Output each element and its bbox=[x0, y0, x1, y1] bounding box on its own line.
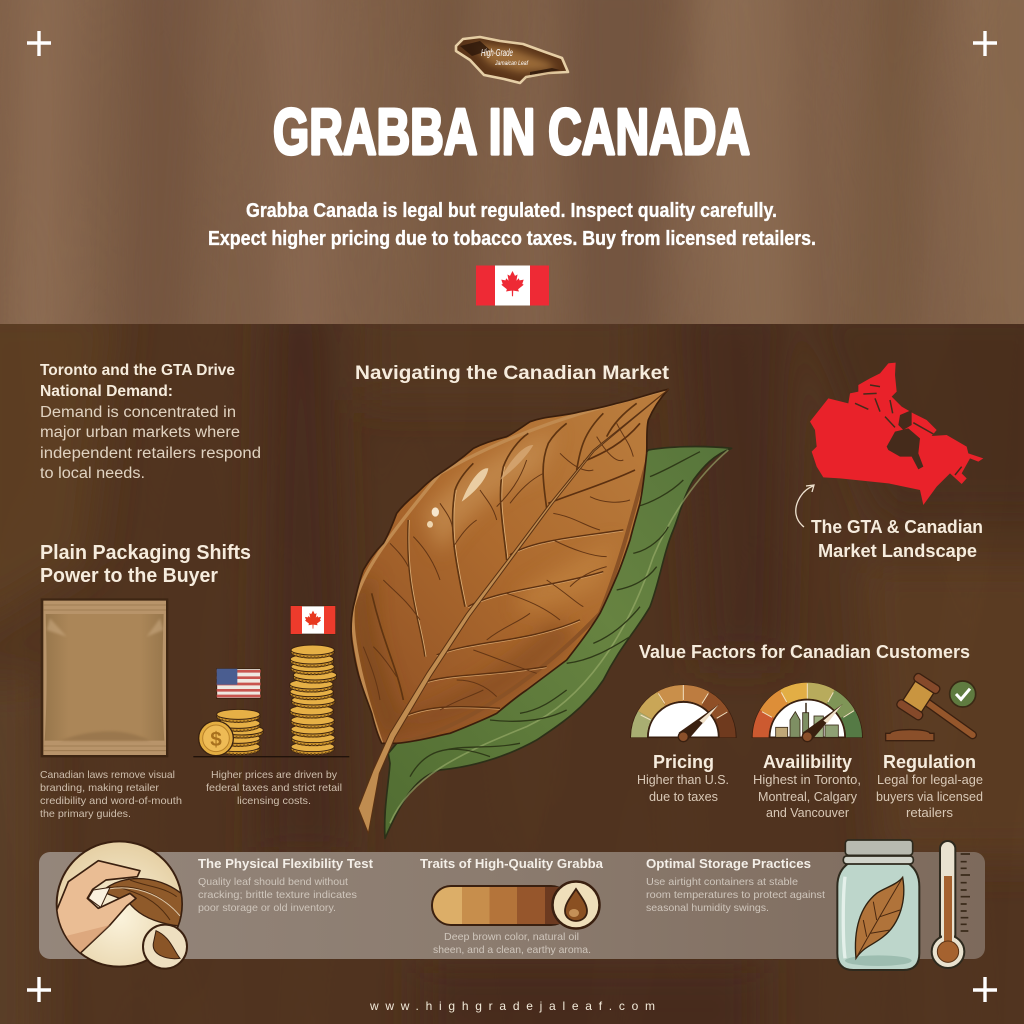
heading: Navigating the Canadian Market: Navigating the Canadian Market bbox=[355, 362, 670, 384]
factor: pricing: due to taxes bbox=[649, 790, 718, 804]
heading: Power to the Buyer bbox=[40, 565, 218, 587]
panel: value factors bbox=[630, 642, 983, 820]
factor: pricing bbox=[637, 752, 729, 804]
text: storage practices: Use airtight containers at stable bbox=[646, 876, 798, 888]
footer: website: www.highgradejaleaf.com bbox=[369, 999, 655, 1013]
factor: pricing: Pricing bbox=[653, 752, 714, 772]
icon: blank pouch bbox=[41, 598, 168, 757]
caption: packaging: branding, making retailer bbox=[40, 782, 160, 794]
caption: prices: licensing costs. bbox=[237, 795, 311, 807]
skyline bbox=[776, 703, 838, 737]
map: Canada bbox=[810, 363, 983, 505]
caption: packaging: the primary guides. bbox=[40, 808, 131, 820]
caption: prices: Higher prices are driven by bbox=[211, 769, 338, 781]
leaf shading bbox=[350, 430, 617, 743]
intro text bbox=[208, 200, 816, 250]
title: GRABBA IN CANADA bbox=[273, 95, 750, 168]
icon: hand flexing leaf bbox=[50, 841, 187, 969]
factor: regulation: retailers bbox=[906, 806, 953, 820]
factor: regulation: Legal for legal-age bbox=[877, 773, 983, 787]
text: storage practices: Optimal Storage Practices bbox=[646, 856, 811, 871]
heading bbox=[40, 542, 251, 587]
logo: Jamaica leaf badge: Jamaican Leaf bbox=[494, 61, 529, 67]
factor: availability: Montreal, Calgary bbox=[758, 790, 858, 804]
green back leaf bbox=[385, 447, 732, 838]
chart: colour swatch bar with oil drop bbox=[431, 882, 600, 928]
text: storage practices: room temperatures to protect against bbox=[646, 889, 825, 901]
label: GTA and Canadian market: The GTA & Canadian bbox=[811, 516, 983, 537]
icon: thermometer bbox=[932, 841, 970, 968]
corner marker: bottom left plus bbox=[27, 977, 51, 1002]
text: physical flexibility test bbox=[198, 856, 374, 914]
icon: Canadian flag bbox=[476, 266, 549, 306]
US coin stack bbox=[199, 709, 263, 756]
Canada coin stack bbox=[290, 645, 337, 755]
text block: Toronto and the GTA: National Demand: bbox=[40, 383, 173, 400]
label: GTA and Canadian market bbox=[811, 516, 983, 561]
background: top header band bbox=[0, 0, 1024, 360]
chart: coin stacks comparing US and Canada bbox=[193, 606, 349, 757]
caption: prices: federal taxes and strict retail bbox=[206, 782, 342, 794]
gauge: availability bbox=[752, 682, 863, 742]
text: physical flexibility test: cracking; brittle texture indicates bbox=[198, 889, 357, 901]
heading: Plain Packaging Shifts bbox=[40, 542, 251, 564]
text: physical flexibility test: poor storage or old inventory. bbox=[198, 902, 336, 914]
caption: packaging: Canadian laws remove visual bbox=[40, 769, 175, 781]
caption: prices bbox=[206, 769, 342, 807]
intro text: Grabba Canada is legal but regulated. Inspect quality carefully. bbox=[246, 200, 777, 222]
caption: traits bbox=[433, 931, 591, 956]
logo: Jamaica leaf badge bbox=[456, 37, 568, 83]
text: physical flexibility test: The Physical Flexibility Test bbox=[198, 856, 374, 871]
text: traits heading: Traits of High-Quality Grabba bbox=[420, 856, 604, 871]
corner marker: bottom right plus bbox=[973, 977, 997, 1002]
factor: availability: and Vancouver bbox=[766, 806, 849, 820]
panel: quality and storage band bbox=[39, 840, 985, 970]
side veins, dark bbox=[372, 403, 637, 700]
text block: Toronto and the GTA bbox=[40, 362, 261, 482]
background: lower dark panel bbox=[0, 300, 1024, 1024]
label: GTA and Canadian market: Market Landscape bbox=[818, 540, 977, 561]
factor: regulation: Regulation bbox=[883, 752, 976, 772]
US coin stack: $ bbox=[210, 728, 222, 751]
text block: Toronto and the GTA: Demand is concentrated in bbox=[40, 404, 236, 421]
gauge: pricing bbox=[630, 685, 737, 742]
caption: packaging bbox=[40, 769, 182, 820]
panel: plain packaging bbox=[40, 542, 349, 820]
intro text: Expect higher pricing due to tobacco taxes. Buy from licensed retailers. bbox=[208, 228, 816, 250]
corner marker: top right plus bbox=[973, 31, 997, 56]
illustration: tobacco leaves bbox=[350, 389, 732, 838]
caption: packaging: credibility and word-of-mouth bbox=[40, 795, 182, 807]
text block: Toronto and the GTA: to local needs. bbox=[40, 465, 145, 482]
text: physical flexibility test: Quality leaf should bend without bbox=[198, 876, 348, 888]
arrow: map pointer bbox=[796, 485, 814, 527]
factor: availability bbox=[753, 752, 861, 820]
factor: regulation bbox=[876, 752, 983, 820]
icon: glass jar with leaf bbox=[837, 840, 919, 970]
logo: Jamaica leaf badge: High-Grade bbox=[481, 48, 513, 59]
highlights bbox=[462, 468, 488, 502]
icon: Canadian flag small bbox=[291, 606, 335, 634]
heading: Value Factors for Canadian Customers bbox=[639, 642, 970, 662]
caption: traits: Deep brown color, natural oil bbox=[444, 931, 579, 943]
factor: regulation: buyers via licensed bbox=[876, 790, 983, 804]
small branching veins bbox=[363, 423, 633, 710]
text block: Toronto and the GTA: independent retailers respond bbox=[40, 445, 261, 462]
text: storage practices bbox=[646, 856, 825, 914]
text: storage practices: seasonal humidity swings. bbox=[646, 902, 769, 914]
icon: US flag bbox=[217, 669, 261, 698]
factor: pricing: Higher than U.S. bbox=[637, 773, 729, 787]
text block: Toronto and the GTA: Toronto and the GTA Drive bbox=[40, 362, 235, 379]
caption: traits: sheen, and a clean, earthy aroma. bbox=[433, 944, 591, 956]
factor: availability: Availibility bbox=[763, 752, 852, 772]
corner marker: top left plus bbox=[27, 31, 51, 56]
band background bbox=[39, 852, 985, 959]
factor: availability: Highest in Toronto, bbox=[753, 773, 861, 787]
text block: Toronto and the GTA: major urban markets where bbox=[40, 424, 240, 441]
stem and midrib bbox=[358, 389, 668, 833]
icon: gavel with check bbox=[886, 672, 976, 741]
brown front leaf bbox=[350, 389, 668, 833]
